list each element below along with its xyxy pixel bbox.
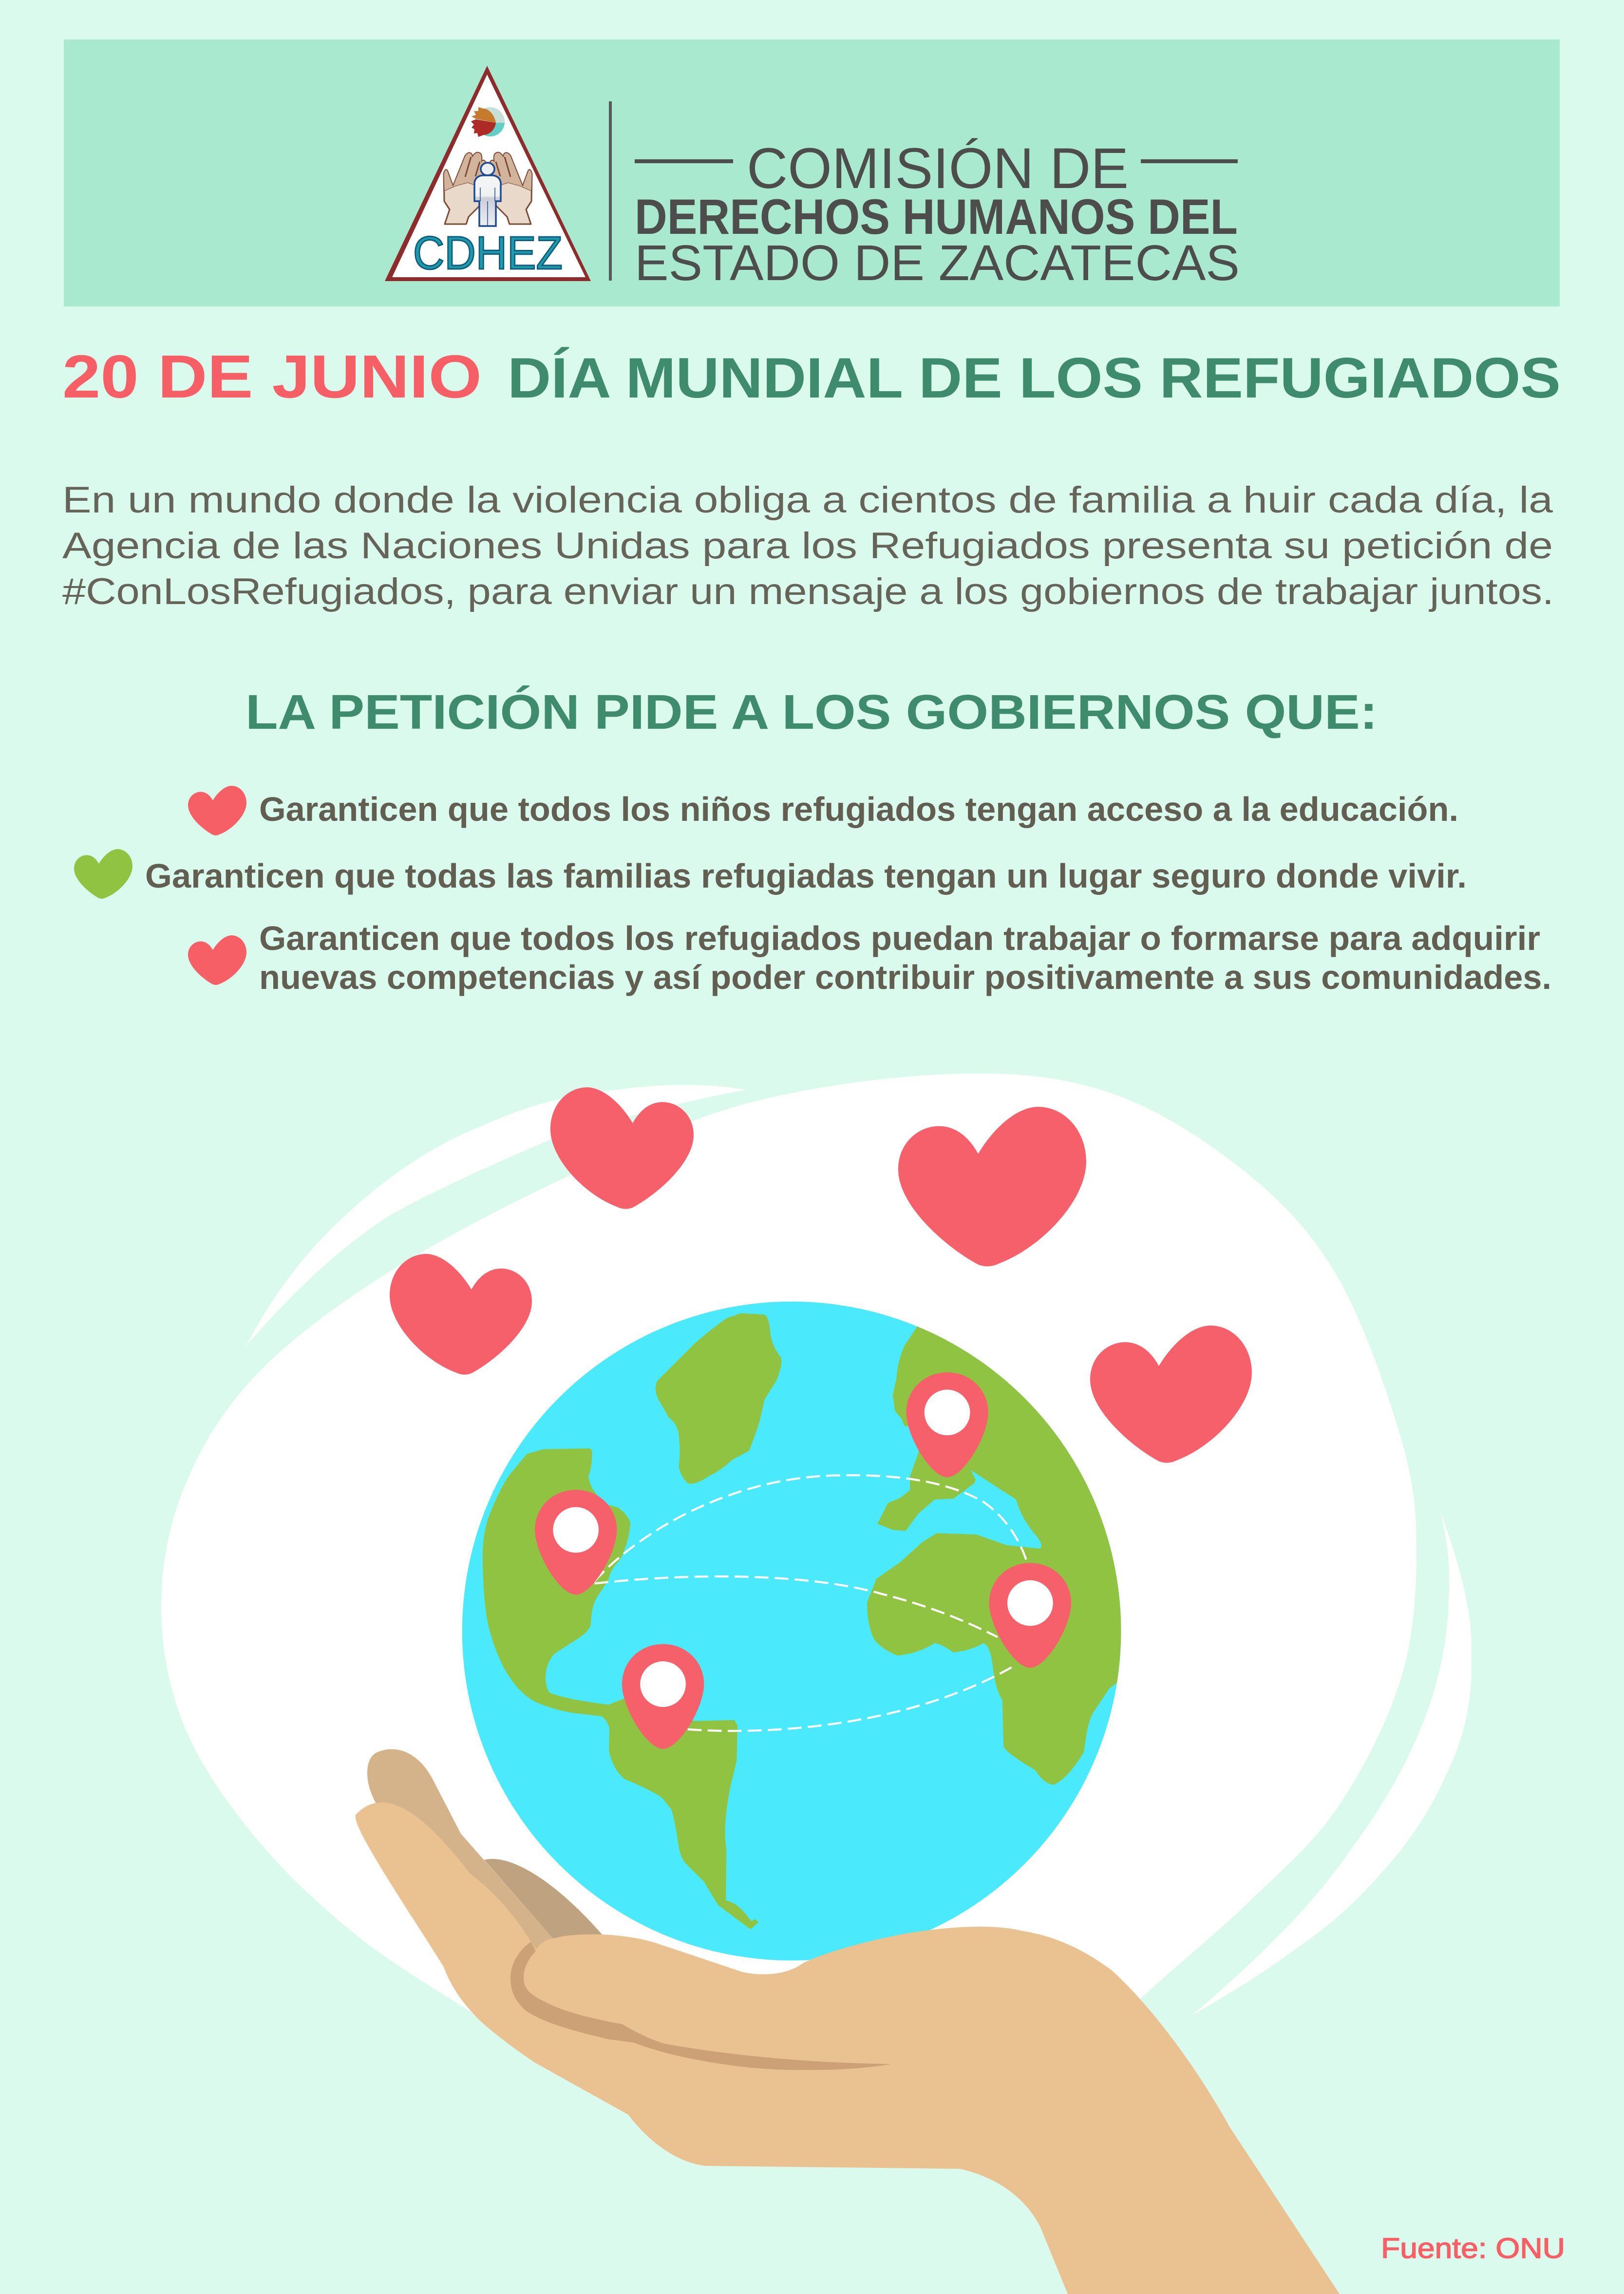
heart: top right large: [898, 1107, 1086, 1267]
icon: red heart 1: [188, 786, 246, 835]
pin: Asia: [989, 1563, 1071, 1668]
icon: logo hands: [444, 152, 532, 224]
intro paragraph: [62, 479, 1554, 612]
intro paragraph: #ConLosRefugiados, para enviar un mensaje a los gobiernos de trabajar juntos.: [62, 571, 1554, 612]
title: 20 DE JUNIO: [62, 343, 482, 411]
organisation name: COMISIÓN DE: [747, 136, 1129, 201]
hand holding globe: [356, 1749, 1340, 2294]
intro paragraph: En un mundo donde la violencia obliga a cientos de familia a huir cada día, la: [62, 479, 1553, 521]
title: [62, 343, 1561, 411]
organisation name: ESTADO DE ZACATECAS: [635, 235, 1240, 291]
source credit: Fuente: ONU: [1381, 2233, 1565, 2264]
subheading: LA PETICIÓN PIDE A LOS GOBIERNOS QUE:: [245, 685, 1378, 739]
organisation name: [635, 136, 1240, 291]
item 3: nuevas competencias y así poder contribuir positivamente a sus comunidades.: [259, 958, 1551, 996]
hand: back finger: [367, 1749, 553, 1953]
icon: green heart: [74, 849, 132, 899]
icon: logo person: [474, 163, 501, 226]
intro paragraph: Agencia de las Naciones Unidas para los Refugiados presenta su petición de: [62, 525, 1553, 567]
pin: Europe: [906, 1372, 988, 1477]
pin: North America: [535, 1490, 617, 1594]
floating hearts: [390, 1087, 1252, 1463]
location pins: [535, 1372, 1071, 1749]
hand: far finger: [484, 1859, 602, 1938]
hand: palm: [356, 1802, 1340, 2294]
title: DÍA MUNDIAL DE LOS REFUGIADOS: [508, 346, 1561, 410]
pin: South America: [622, 1644, 704, 1749]
illustration: white backdrop: [161, 1073, 1472, 2015]
icon: red heart 2: [188, 935, 246, 985]
header banner: [64, 39, 1560, 306]
land masses: [483, 1313, 1184, 1929]
item 3: [259, 919, 1551, 996]
heart: top left: [550, 1087, 694, 1209]
icon: logo sun: [471, 107, 505, 137]
item 2: Garanticen que todas las familias refugiadas tengan un lugar seguro donde vivir.: [145, 857, 1467, 895]
globe: [462, 1302, 1184, 1960]
item 1: Garanticen que todos los niños refugiados tengan acceso a la educación.: [259, 790, 1458, 828]
organisation name: DERECHOS HUMANOS DEL: [635, 189, 1238, 245]
hand: palm crease: [510, 1942, 891, 2070]
dashed routes: [594, 1475, 1028, 1731]
heart: right: [1090, 1326, 1252, 1463]
list of petitions: [74, 786, 1551, 996]
heart: left: [390, 1254, 532, 1375]
logo: CDHEZ triangle: [385, 66, 591, 281]
item 3: Garanticen que todos los refugiados puedan trabajar o formarse para adquirir: [259, 919, 1540, 957]
logo wordmark: CDHEZ: [413, 227, 563, 279]
